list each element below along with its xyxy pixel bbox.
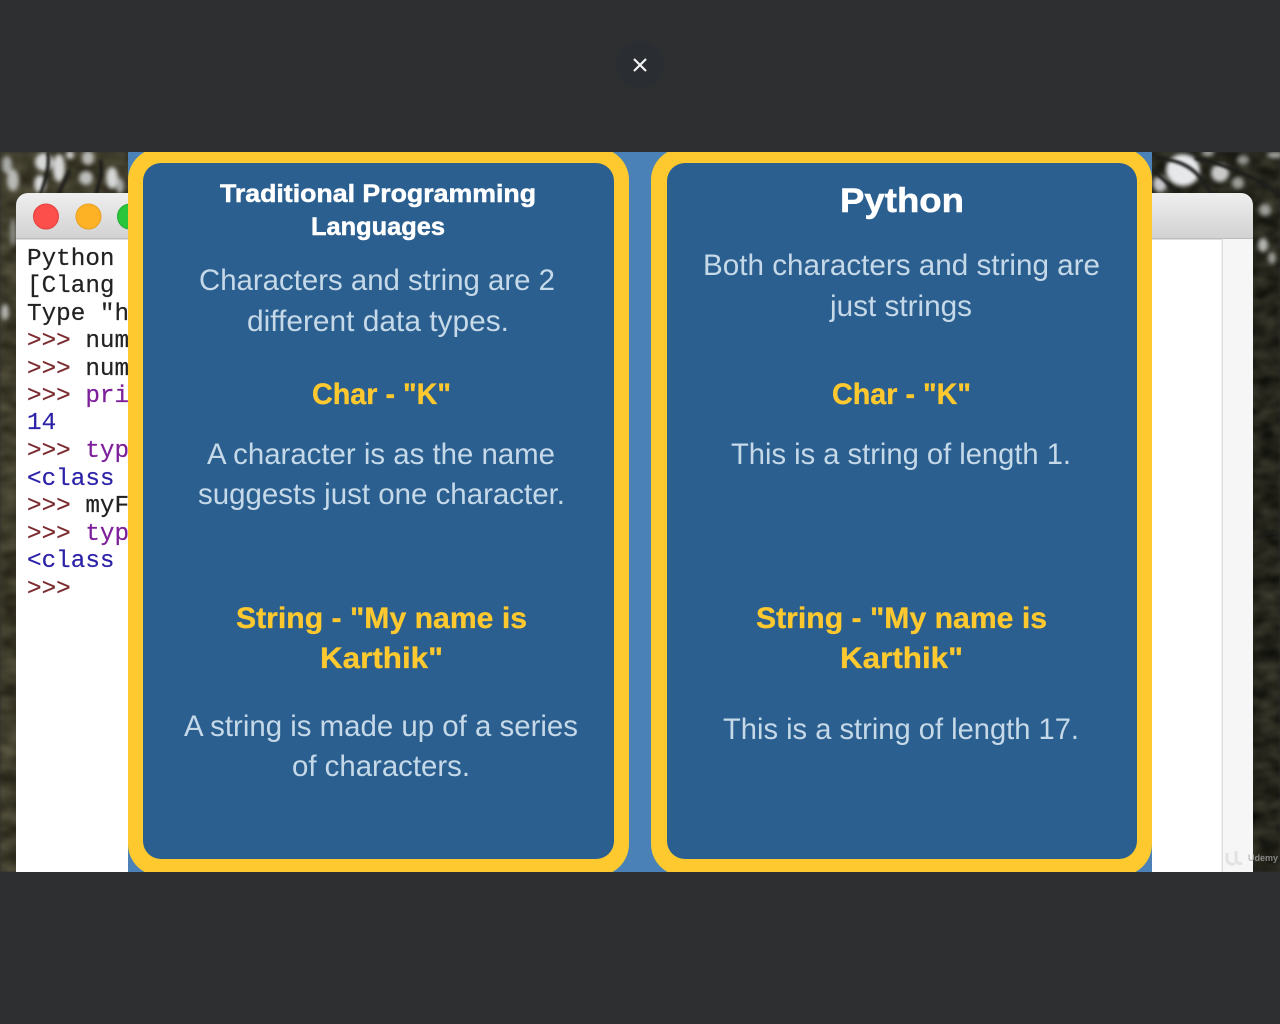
right panel yellow frame xyxy=(651,148,1152,876)
left panel string description: A string is made up of a series xyxy=(184,710,578,743)
panel: python xyxy=(651,148,1152,876)
terminal body xyxy=(16,236,1253,872)
panel: traditional programming languages xyxy=(128,148,629,876)
terminal window xyxy=(16,193,1253,872)
window control: close xyxy=(34,204,58,229)
left panel heading xyxy=(220,180,536,241)
right panel heading: Python xyxy=(840,182,964,220)
left panel heading: Traditional Programming xyxy=(220,180,536,208)
left panel intro text: different data types. xyxy=(247,305,509,338)
right panel string description: This is a string of length 17. xyxy=(723,713,1079,746)
terminal text xyxy=(27,246,129,603)
left panel char description: A character is as the name xyxy=(207,438,555,471)
left panel blue face xyxy=(143,163,614,859)
terminal text: >>> xyxy=(27,576,71,603)
right panel blue face xyxy=(667,163,1137,859)
right panel char description: This is a string of length 1. xyxy=(731,438,1071,471)
left panel string description: of characters. xyxy=(292,750,470,783)
terminal text: >>> myF xyxy=(27,493,129,520)
right panel char heading: Char - "K" xyxy=(832,378,971,411)
terminal text: 14 xyxy=(27,410,56,437)
left panel intro text: Characters and string are 2 xyxy=(199,264,555,297)
right panel string heading xyxy=(756,606,1046,668)
udemy watermark: Udemy xyxy=(1248,853,1278,863)
right panel string heading: Karthik" xyxy=(840,642,963,675)
left panel heading: Languages xyxy=(311,213,445,241)
right panel string heading: String - "My name is xyxy=(756,602,1047,635)
left panel string heading xyxy=(236,606,526,668)
left panel string heading: String - "My name is xyxy=(236,602,527,635)
left panel string description xyxy=(184,714,577,776)
left panel char heading: Char - "K" xyxy=(312,378,451,411)
terminal text: >>> num xyxy=(27,356,129,383)
left panel yellow frame xyxy=(128,148,629,876)
background photo: tree branches xyxy=(0,150,1280,872)
terminal text: <class xyxy=(27,466,114,493)
left panel char description xyxy=(198,438,565,511)
close button xyxy=(616,41,664,89)
window control: minimize xyxy=(76,204,101,229)
udemy watermark xyxy=(1227,851,1278,864)
right panel intro text xyxy=(703,249,1100,323)
terminal text: >>> typ xyxy=(27,521,129,548)
slide background xyxy=(128,152,1152,872)
terminal text: >>> num xyxy=(27,328,129,355)
left panel string heading: Karthik" xyxy=(320,642,443,675)
terminal text: <class xyxy=(27,548,114,575)
terminal title bar xyxy=(16,193,1253,238)
terminal text: Python xyxy=(27,246,114,273)
terminal text: >>> typ xyxy=(27,438,129,465)
right panel intro text: Both characters and string are xyxy=(703,249,1100,282)
window control: zoom xyxy=(118,204,142,229)
terminal text: Type "h xyxy=(27,301,129,328)
terminal text: >>> pri xyxy=(27,383,129,410)
left panel char description: suggests just one character. xyxy=(198,478,565,511)
scrollbar track xyxy=(1222,239,1253,872)
terminal text: [Clang xyxy=(27,273,114,300)
right panel intro text: just strings xyxy=(829,290,972,323)
left panel intro text xyxy=(199,264,555,338)
